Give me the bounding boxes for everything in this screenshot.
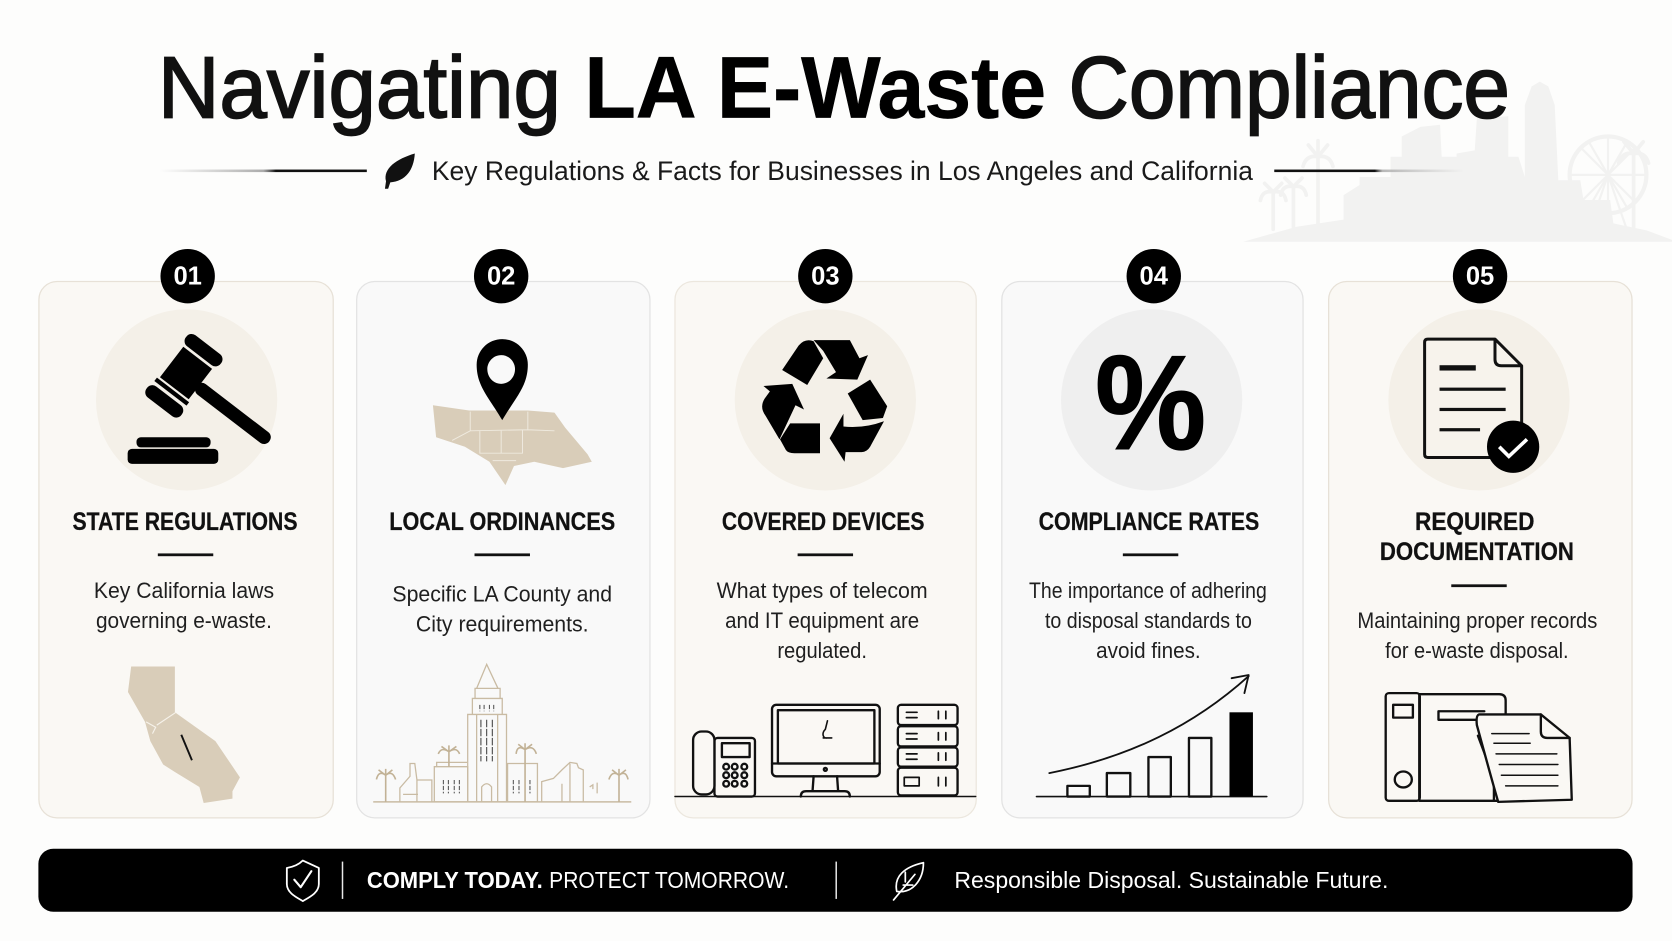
heading: COVERED DEVICES bbox=[722, 509, 925, 536]
title bbox=[158, 38, 1510, 136]
description: for e-waste disposal. bbox=[1385, 638, 1569, 663]
icon: location pin bbox=[477, 339, 528, 420]
badge 02: 02 bbox=[487, 263, 515, 291]
panel: local ordinances bbox=[357, 249, 650, 818]
footer banner bbox=[38, 849, 1633, 912]
icon: percent sign: % bbox=[1095, 328, 1206, 478]
panel: compliance rates bbox=[1002, 249, 1303, 818]
tagline: Responsible Disposal. Sustainable Future. bbox=[954, 867, 1388, 893]
description: avoid fines. bbox=[1096, 638, 1201, 663]
panel: state regulations bbox=[39, 249, 333, 818]
subtitle with leaf and rules bbox=[160, 154, 1464, 189]
badge 03 bbox=[798, 249, 853, 303]
heading: LOCAL ORDINANCES bbox=[389, 509, 615, 536]
badge 03: 03 bbox=[811, 263, 840, 291]
badge 01: 01 bbox=[173, 263, 202, 291]
icon: percent sign bbox=[1061, 309, 1242, 491]
illustration: binder and papers bbox=[1386, 693, 1572, 802]
description bbox=[1029, 578, 1267, 663]
icon: recycling symbol bbox=[735, 309, 916, 491]
map: LA county bbox=[433, 405, 592, 485]
illustration: phone, monitor and server bbox=[675, 705, 976, 797]
map: California bbox=[128, 666, 240, 803]
description: to disposal standards to bbox=[1045, 608, 1252, 633]
slogan: PROTECT TOMORROW. bbox=[549, 867, 789, 893]
title: LA E-Waste bbox=[584, 38, 1046, 136]
heading bbox=[1380, 509, 1574, 566]
illustration: city hall bbox=[373, 664, 631, 802]
badge 04: 04 bbox=[1140, 263, 1169, 291]
badge 04 bbox=[1127, 249, 1181, 303]
panel: covered devices bbox=[675, 249, 976, 818]
badge 01 bbox=[160, 249, 215, 303]
subtitle text: Key Regulations & Facts for Businesses in Los Angeles and California bbox=[432, 156, 1253, 186]
description: governing e-waste. bbox=[96, 608, 272, 633]
icon: document with check bbox=[1388, 309, 1570, 491]
heading: REQUIRED bbox=[1415, 509, 1534, 536]
description: The importance of adhering bbox=[1029, 578, 1267, 603]
icon: leaf outline bbox=[894, 863, 923, 900]
description bbox=[1357, 608, 1597, 663]
description: regulated. bbox=[777, 638, 867, 663]
icon: leaf bbox=[385, 154, 415, 189]
description: Maintaining proper records bbox=[1357, 608, 1597, 633]
badge 05 bbox=[1453, 249, 1507, 303]
heading: COMPLIANCE RATES bbox=[1039, 509, 1259, 536]
background skyline silhouette bbox=[1243, 82, 1672, 242]
description: City requirements. bbox=[416, 611, 589, 636]
description: and IT equipment are bbox=[725, 608, 919, 633]
description: Key California laws bbox=[94, 578, 274, 603]
badge 05: 05 bbox=[1466, 263, 1494, 291]
slogan bbox=[367, 867, 789, 893]
slogan: COMPLY TODAY. bbox=[367, 867, 543, 893]
icon: shield check bbox=[287, 861, 319, 901]
title: Navigating bbox=[158, 38, 561, 136]
bar chart with rising arrow bbox=[1036, 675, 1267, 797]
badge 02 bbox=[474, 249, 528, 303]
heading: DOCUMENTATION bbox=[1380, 539, 1574, 566]
description bbox=[392, 581, 612, 636]
description bbox=[94, 578, 274, 633]
heading: STATE REGULATIONS bbox=[73, 509, 298, 536]
description: What types of telecom bbox=[717, 578, 928, 603]
description: Specific LA County and bbox=[392, 581, 612, 606]
icon: gavel bbox=[96, 309, 293, 491]
panel: required documentation bbox=[1329, 249, 1632, 818]
title: Compliance bbox=[1068, 38, 1510, 136]
description bbox=[717, 578, 928, 663]
